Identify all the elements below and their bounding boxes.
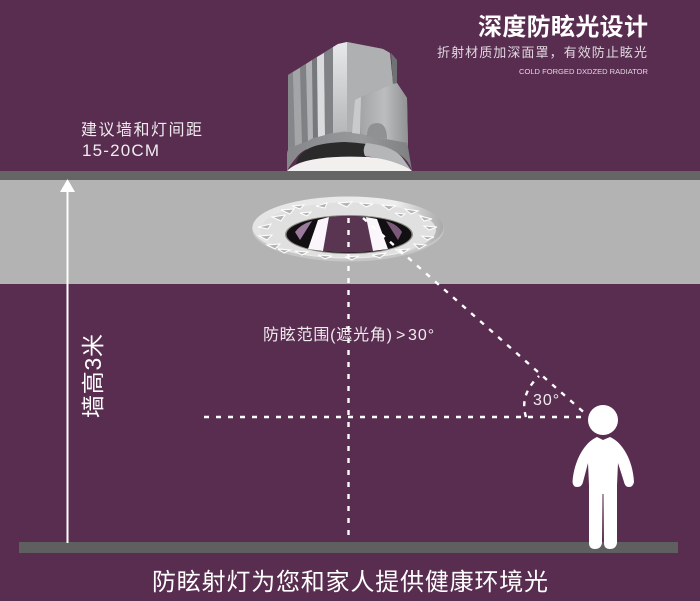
spacing note: 15-20CM — [82, 141, 159, 160]
horizontal dashed line — [204, 416, 588, 418]
round boss — [367, 123, 387, 139]
body backing — [288, 42, 408, 150]
diagonal dashed sight line — [363, 218, 588, 416]
title: 深度防眩光设计 — [478, 14, 648, 41]
reflector opening — [285, 215, 413, 254]
glare range label: 防眩范围(遮光角) — [263, 326, 392, 344]
glare range label: > — [396, 327, 405, 344]
downlight fixture — [287, 42, 412, 171]
height arrow — [60, 179, 75, 543]
ceiling band — [0, 171, 700, 284]
subtitle: 折射材质加深面罩，有效防止眩光 — [437, 45, 647, 60]
person icon — [572, 405, 634, 549]
height label: 墙高3米 — [80, 334, 106, 418]
glare range label: 30° — [408, 327, 435, 344]
floor bar — [19, 542, 678, 553]
white trim visible under the fixture — [287, 156, 412, 171]
collar right panel — [364, 143, 411, 170]
spacing note — [81, 121, 202, 160]
angle arc — [524, 376, 539, 417]
reflector side glints — [295, 221, 312, 240]
bottom slogan: 防眩射灯为您和家人提供健康环境光 — [152, 569, 548, 596]
vertical dashed line — [347, 218, 350, 542]
recessed ring trim — [252, 196, 444, 262]
housing inner shadow — [352, 97, 361, 134]
rear vent — [391, 53, 397, 85]
decorative notches — [258, 202, 437, 260]
fins — [288, 42, 347, 148]
angle label: 30° — [533, 392, 560, 409]
side housing — [361, 83, 408, 143]
reflector white strips — [308, 217, 329, 251]
bright rib — [333, 42, 347, 133]
base collar — [287, 131, 412, 171]
spacing note: 建议墙和灯间距 — [81, 121, 202, 139]
upper body — [345, 42, 393, 132]
english caption: COLD FORGED DXDZED RADIATOR — [519, 69, 648, 76]
dark gap — [296, 141, 366, 164]
reflector centre — [323, 216, 373, 252]
